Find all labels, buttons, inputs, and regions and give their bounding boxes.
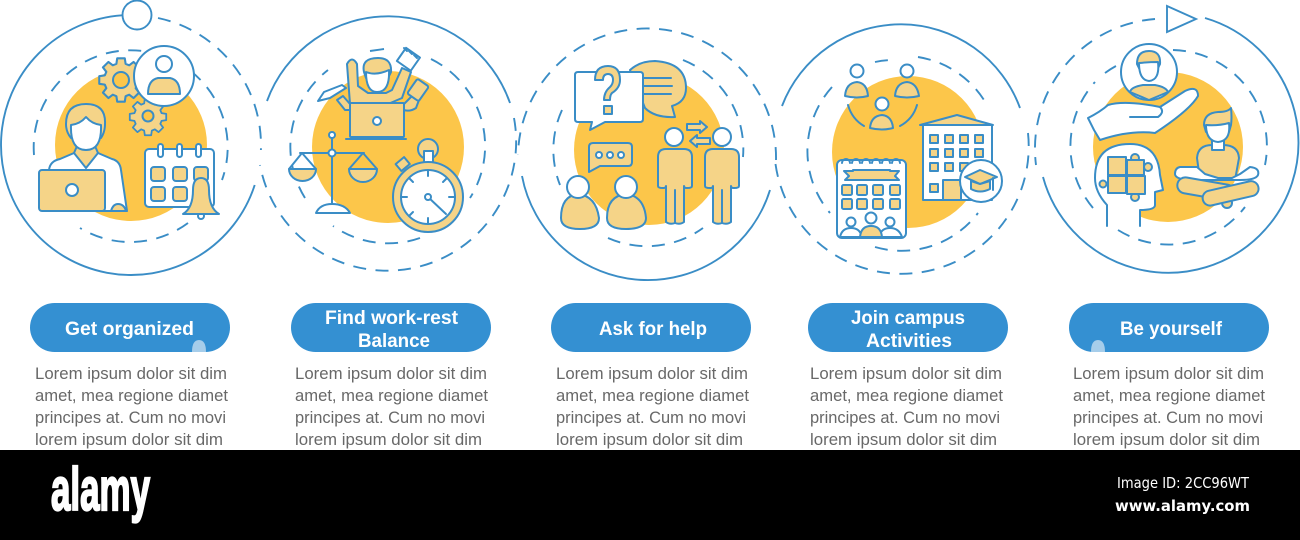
icon: event calendar: [837, 159, 906, 238]
text block 2: Lorem ipsum dolor sit dim: [295, 364, 487, 383]
panel: find work-rest balance: [260, 16, 516, 271]
text block 1: lorem ipsum dolor sit dim: [35, 430, 223, 449]
icon: university building: [920, 115, 1002, 202]
yellow disc 3: [574, 75, 724, 225]
footer bar: [0, 450, 1300, 540]
pill: get organized: [30, 303, 230, 352]
pill: ask for help: [551, 303, 751, 352]
icon: gears: [99, 58, 166, 135]
icon: user badge: [134, 46, 194, 106]
icon: meditating person: [1175, 108, 1260, 208]
panel: ask for help: [518, 28, 776, 280]
website: www.alamy.com: [1115, 497, 1250, 515]
panel: join campus activities: [775, 24, 1029, 274]
yellow disc 2: [312, 71, 464, 223]
text block 1: principes at. Cum no movi: [35, 408, 226, 427]
text block 4: amet, mea regione diamet: [810, 386, 1003, 405]
icon: head with puzzle: [1095, 144, 1163, 226]
ring 2: [260, 16, 516, 271]
text block 2: lorem ipsum dolor sit dim: [295, 430, 482, 449]
icon: chat with seated people: [561, 143, 646, 229]
text block 4: lorem ipsum dolor sit dim: [810, 430, 997, 449]
icon: balance scales: [289, 132, 377, 213]
icon: man with laptop: [39, 104, 127, 211]
ring 1: [1, 0, 261, 275]
pill: join campus activities: Join campus: [851, 308, 965, 329]
pill: find work-rest balance: Find work-rest: [325, 308, 459, 329]
yellow disc 1: [55, 69, 207, 221]
text block 5: amet, mea regione diamet: [1073, 386, 1265, 405]
icon: student group: [845, 64, 919, 130]
text block 1: [35, 364, 228, 449]
text block 2: principes at. Cum no movi: [295, 408, 485, 427]
pill: be yourself: Be yourself: [1120, 319, 1223, 340]
pill: find work-rest balance: [291, 303, 491, 352]
pill: get organized: Get organized: [65, 319, 194, 340]
icon: multitasking worker: [318, 48, 429, 139]
ring 4: [775, 24, 1029, 274]
image id: Image ID: 2CC96WT: [1117, 474, 1250, 492]
text block 3: Lorem ipsum dolor sit dim: [556, 364, 748, 383]
text block 3: amet, mea regione diamet: [556, 386, 749, 405]
text block 2: amet, mea regione diamet: [295, 386, 488, 405]
pill: be yourself: [1069, 303, 1269, 352]
text block 3: principes at. Cum no movi: [556, 408, 746, 427]
ring 5: [1035, 18, 1298, 273]
pill: ask for help: Ask for help: [599, 319, 707, 340]
pill: find work-rest balance: Balance: [358, 331, 430, 352]
panel: get organized: [1, 0, 261, 275]
text block 1: amet, mea regione diamet: [35, 386, 228, 405]
text block 2: [295, 364, 488, 449]
icon: two people exchanging: [658, 121, 739, 224]
icon: calendar and bell: [145, 144, 219, 219]
text block 5: principes at. Cum no movi: [1073, 408, 1263, 427]
text block 4: [810, 364, 1003, 449]
pill: join campus activities: Activities: [866, 331, 952, 352]
text block 3: [556, 364, 749, 449]
logo: alamy: alamy: [51, 456, 150, 523]
text block 5: [1073, 364, 1265, 449]
text block 5: lorem ipsum dolor sit dim: [1073, 430, 1260, 449]
text block 1: Lorem ipsum dolor sit dim: [35, 364, 227, 383]
icon: stopwatch: [393, 139, 463, 232]
icon: man portrait in hand: [1088, 44, 1198, 140]
text block 4: Lorem ipsum dolor sit dim: [810, 364, 1002, 383]
icon: speech bubbles with question: [575, 61, 686, 130]
panel: be yourself: [1035, 6, 1298, 273]
icon: play triangle: [1167, 6, 1196, 32]
yellow disc 4: [832, 76, 984, 228]
text block 5: Lorem ipsum dolor sit dim: [1073, 364, 1264, 383]
text block 3: lorem ipsum dolor sit dim: [556, 430, 743, 449]
ring 3: [518, 28, 776, 280]
pill: join campus activities: [808, 303, 1008, 352]
yellow disc 5: [1093, 72, 1243, 222]
text block 4: principes at. Cum no movi: [810, 408, 1000, 427]
